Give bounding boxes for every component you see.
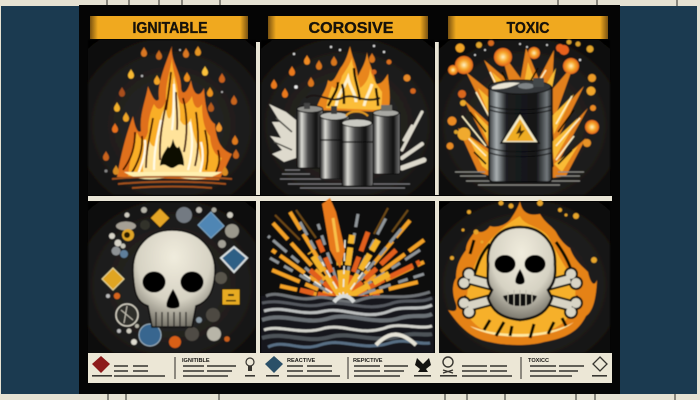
left blue side panel [1,6,79,394]
icon: spark droplets [271,45,416,98]
icon: embers [450,200,597,263]
panel: toxic barrel [439,40,610,195]
header: ignitable [90,16,248,39]
legend item: toxic skull [440,357,512,377]
icon: barrel 2 [320,106,349,179]
icon: flames behind barrels [316,46,390,112]
icon: hazard triangle [501,113,539,143]
icon: falling droplets [103,46,239,176]
icon: water waves [261,292,434,353]
icon: hoses over barrels [306,95,380,100]
icon: toxic drum [489,78,552,182]
header: toxic [448,16,608,39]
legend panel [88,353,612,383]
icon: barrel 4 [373,105,400,174]
icon: white splash right [402,112,424,168]
divider: top left [256,42,260,195]
icon: skull [488,227,555,320]
icon: floor shadow lines [280,170,410,188]
icon: white splash left [269,104,296,162]
header: toxic: TOXIC [506,20,550,37]
legend item: ignitible: IGNITIBLE [182,358,210,364]
legend item: toxicc: TOXICC [528,358,549,364]
icon: skull [133,230,215,327]
legend item: reactive [265,356,340,377]
header: ignitable: IGNITABLE [132,20,208,37]
central black board [79,5,620,394]
right blue side panel [620,6,697,394]
panel: skull and crossbones on fire [439,200,610,353]
icon: fire ring [448,201,597,345]
panel: reactive explosion over water [261,198,434,353]
legend item: repictive [353,358,431,377]
legend item: reactive: REACTIVE [287,358,316,364]
header: corrosive [268,16,428,39]
icon: flame [112,46,232,188]
icon: explosion rays [268,198,424,300]
legend item: repictive: REPICTIVE [353,358,383,364]
header: corrosive: COROSIVE [308,20,394,37]
icon: crossbones [458,268,582,318]
panel: ignitable flame [88,40,256,195]
panel: corrosive barrels [261,40,434,195]
icon: barrel 1 [297,103,323,168]
legend item: toxicc [528,357,607,377]
panel: toxic skull with chemicals [88,202,256,353]
legend item: ignitible [92,356,255,377]
horizontal divider [88,196,612,201]
dividers: bottom [258,201,437,353]
icon: barrel 3 [342,112,373,186]
icon: surrounding chemicals [102,207,247,348]
icon: floor lines [455,172,584,185]
icon: fireballs [446,40,599,150]
icon: sparks burst [458,48,588,178]
divider: top right [435,42,439,195]
